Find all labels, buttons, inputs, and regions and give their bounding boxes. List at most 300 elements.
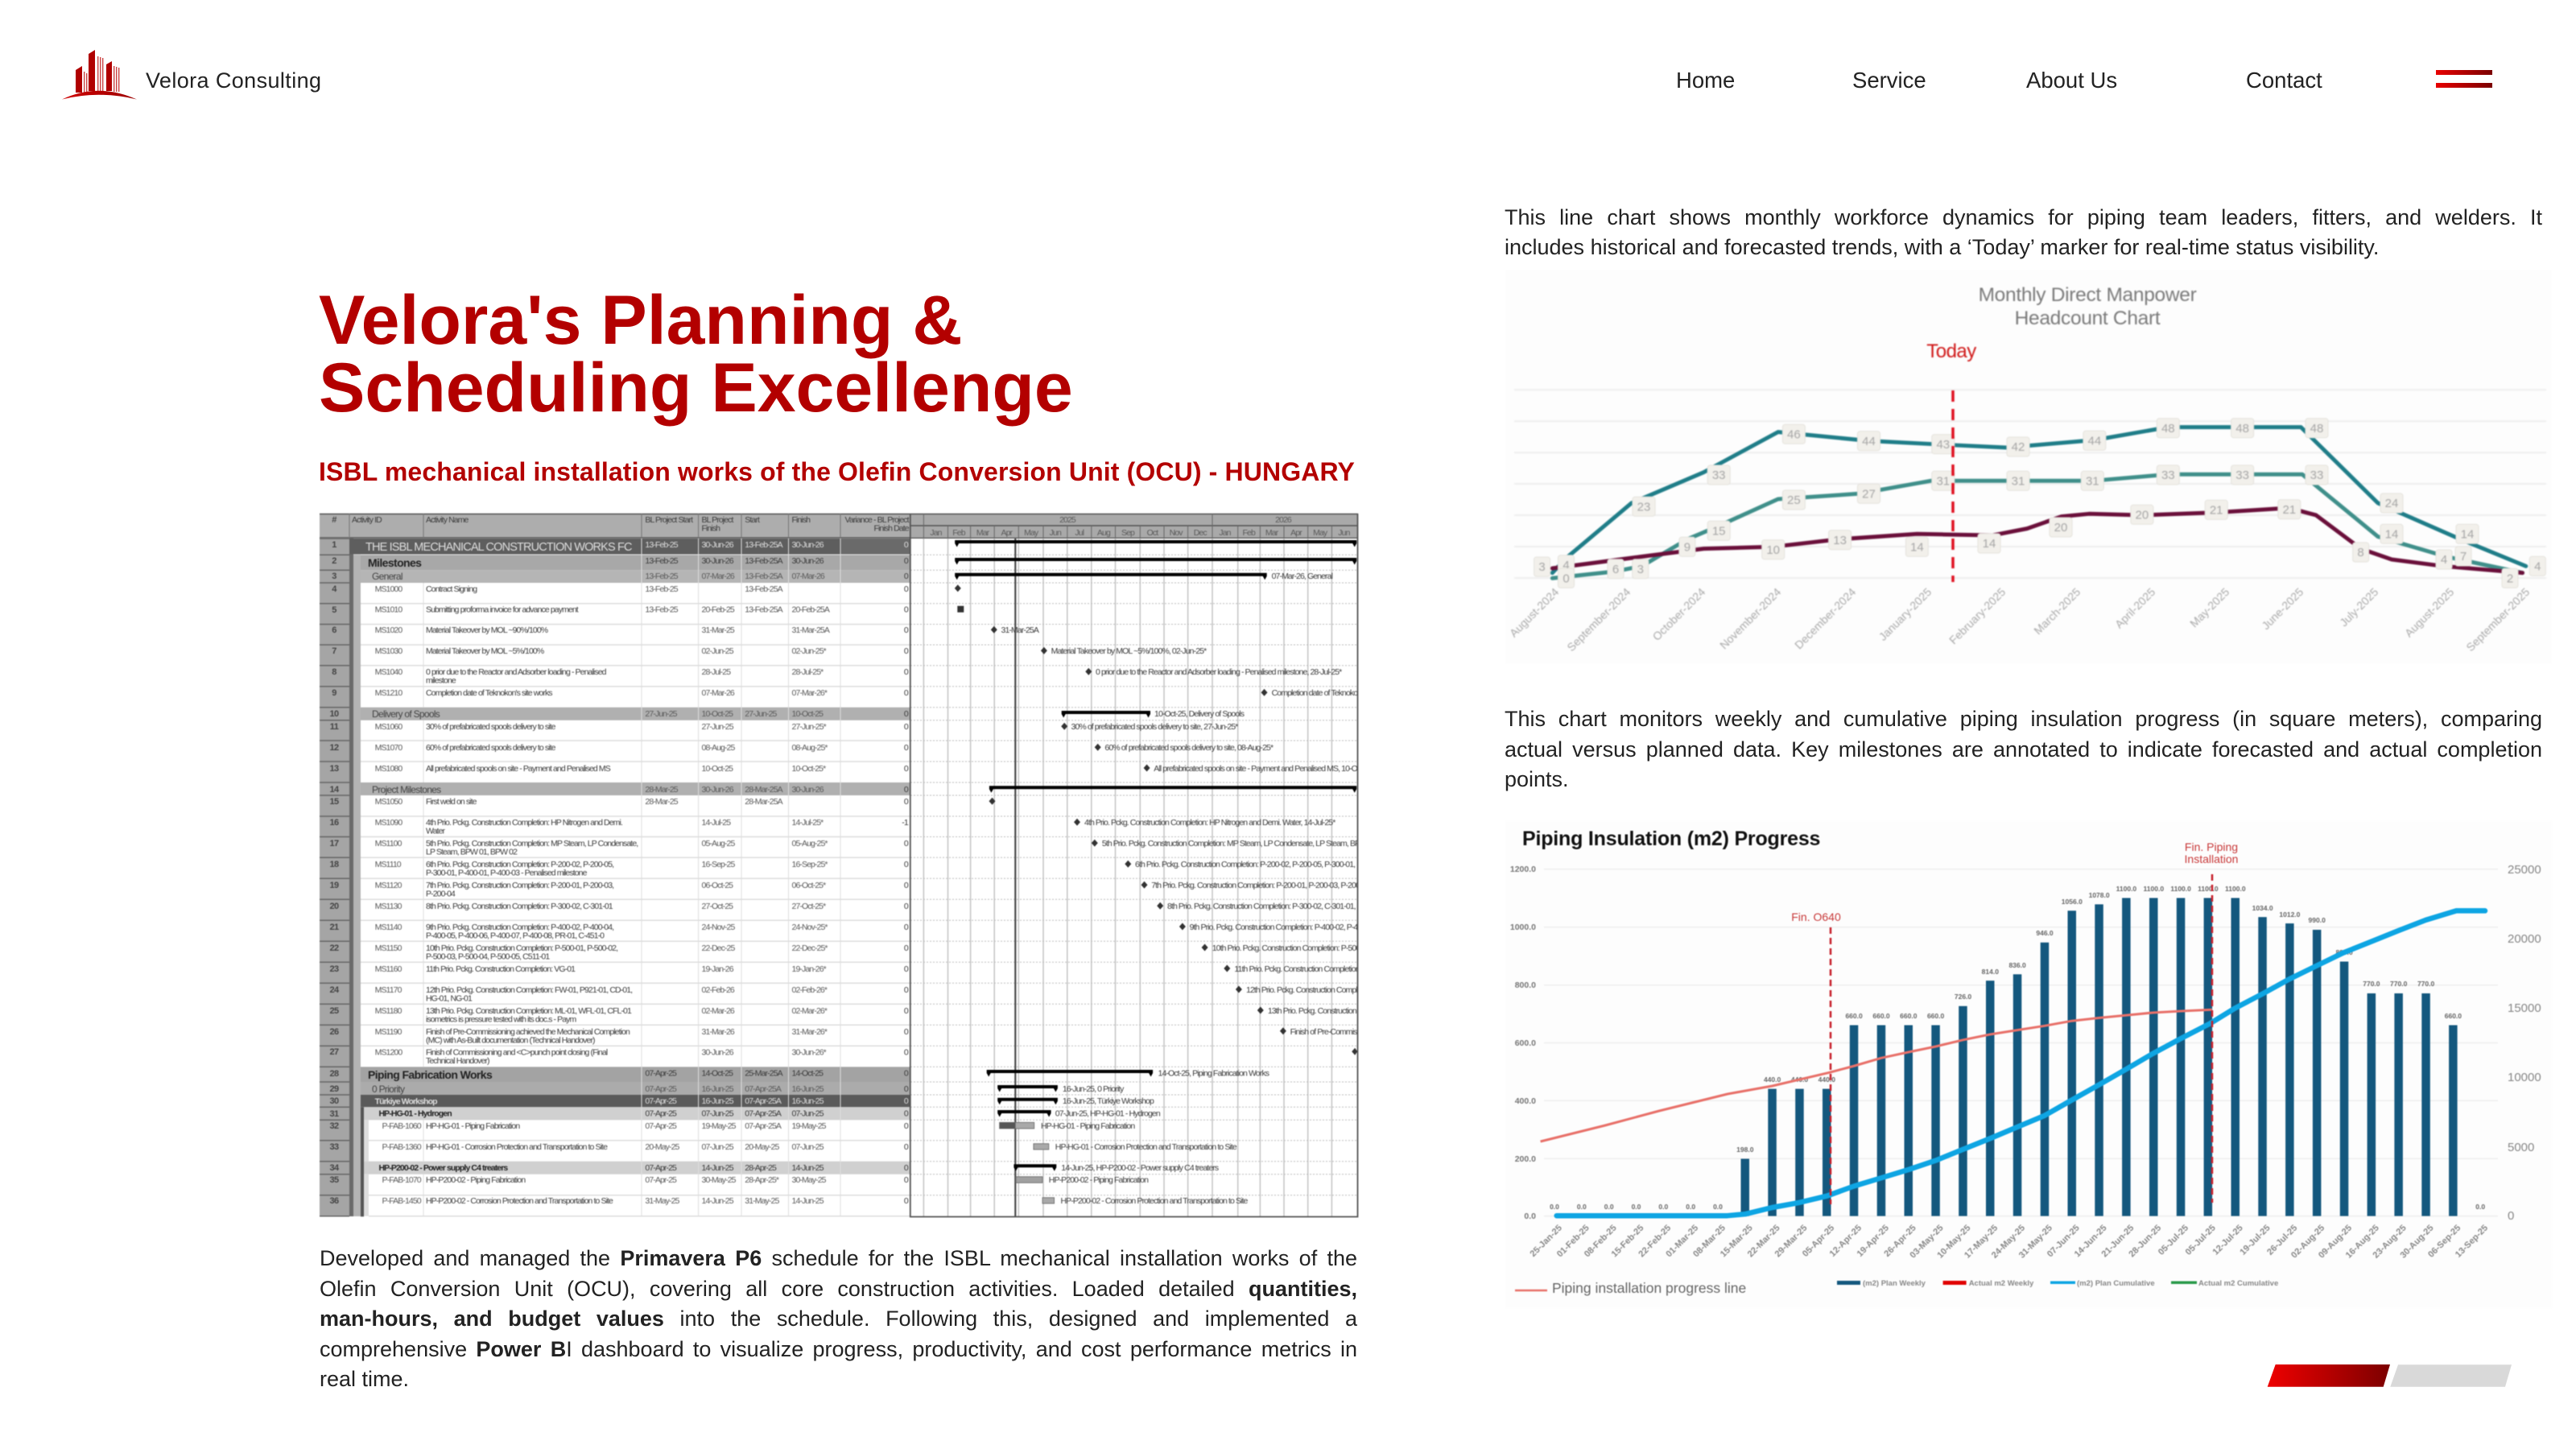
data labels: 33 (1712, 469, 1726, 482)
text block: insulation chart description: points. (1505, 767, 1569, 791)
gantt delivery of spools rows: 10-Oct-25* (792, 764, 826, 774)
data labels: 14 (1910, 541, 1924, 554)
text block: insulation chart description: This chart monitors weekly and cumulative piping insulation progress (in square meters), comparing (1505, 707, 2542, 731)
x axis date labels: 05-Jul-25 (2184, 1223, 2218, 1257)
gantt row numbers: 10 (329, 709, 339, 719)
gantt timeline header: years and months: Jan (930, 528, 943, 538)
chart title: Headcount Chart (2015, 308, 2161, 329)
x axis month labels: September-2025 (2463, 585, 2533, 654)
gantt milestones rows: 13-Feb-25A (745, 540, 783, 550)
gantt project milestones rows: 0 (904, 902, 909, 911)
gantt piping fabrication rows: 07-Apr-25 (645, 1109, 677, 1119)
gantt piping fabrication rows: 20-May-25 (745, 1142, 779, 1152)
gantt table header: BL Project (702, 515, 734, 525)
gantt project milestones rows: 8th Prio. Pckg. Construction Completion: P-300-02, C-301-01 (426, 902, 613, 911)
data labels: 8 (2357, 546, 2364, 559)
gantt project milestones rows (372, 784, 909, 1066)
x axis month labels: February-2025 (1946, 585, 2008, 646)
gantt delivery of spools rows: 08-Aug-25 (702, 743, 735, 753)
x axis date labels: 07-Jun-25 (2046, 1223, 2082, 1259)
title: Scheduling Excellenge (319, 349, 1073, 427)
x axis date labels: 13-Sep-25 (2454, 1223, 2490, 1260)
data labels: 20 (2054, 521, 2067, 535)
x axis date labels: 14-Jun-25 (2073, 1223, 2109, 1259)
gantt project milestones rows: MS1130 (375, 902, 402, 911)
gantt piping fabrication rows: 0 (904, 1142, 909, 1152)
gantt delivery of spools rows (372, 708, 909, 774)
x axis date labels: 03-May-25 (1908, 1223, 1946, 1261)
line: piping installation progress (1541, 1009, 2212, 1141)
gantt piping fabrication rows: 14-Oct-25 (702, 1069, 733, 1079)
bar value labels: 814.0 (1982, 968, 1999, 976)
gantt milestones rows: 31-Mar-25 (702, 625, 735, 635)
gantt bar labels: 14-Oct-25, Piping Fabrication Works (1158, 1069, 1269, 1079)
bar value labels: 198.0 (1736, 1146, 1754, 1154)
gantt piping fabrication rows: 28-Apr-25 (745, 1163, 777, 1173)
gantt project milestones rows: 28-Mar-25A (745, 785, 783, 795)
gantt timeline header: years and months: Dec (1194, 528, 1207, 538)
gantt project milestones rows: Water (426, 827, 446, 836)
bar value labels: 1100.0 (2225, 885, 2246, 893)
gantt row numbers: 16 (329, 818, 339, 828)
data labels: 21 (2210, 504, 2223, 517)
bar value labels: 1056.0 (2062, 898, 2083, 906)
gantt timeline header: years and months: Jan (1219, 528, 1232, 538)
gantt project milestones rows: P-500-03, P-500-04, P-500-05, C511-01 (426, 952, 550, 962)
text block: schedule description: Olefin Conversion Unit (OCU), covering all core construction activities. Loaded detailed quantities, (320, 1277, 1357, 1301)
legend: progress line: Piping installation progress line (1552, 1280, 1746, 1296)
gantt project milestones rows: 06-Oct-25 (702, 881, 733, 890)
x axis date labels: 25-Jan-25 (1529, 1223, 1564, 1259)
bar value labels: 1100.0 (2116, 885, 2136, 893)
gantt milestones rows: 28-Jul-25* (792, 667, 824, 677)
gantt milestones rows: 31-Mar-25A (792, 625, 830, 635)
legend: series: (m2) Plan Weekly (1863, 1279, 1926, 1288)
x axis date labels: 31-May-25 (2017, 1223, 2054, 1261)
gantt bar labels (1001, 572, 1359, 1206)
data labels: 33 (2310, 469, 2323, 482)
gantt delivery of spools rows: 27-Jun-25 (702, 722, 734, 732)
gantt milestones rows: 13-Feb-25A (745, 605, 783, 615)
gantt row numbers (329, 540, 340, 1206)
gantt bar labels: 60% of prefabricated spools delivery to site, 08-Aug-25* (1104, 743, 1274, 753)
gantt piping fabrication rows: Piping Fabrication Works (368, 1068, 493, 1081)
gantt milestones rows: 13-Feb-25A (745, 572, 783, 581)
gantt project milestones rows: MS1160 (375, 964, 402, 974)
x axis date labels: 10-May-25 (1935, 1223, 1972, 1261)
x axis date labels: 17-May-25 (1963, 1223, 2000, 1261)
gantt piping fabrication rows: 25-Mar-25A (745, 1069, 783, 1079)
gantt milestones rows: 20-Feb-25A (792, 605, 830, 615)
title (319, 282, 1073, 427)
bar value labels: 440.0 (1818, 1075, 1835, 1084)
nav: Contact: Contact (2246, 68, 2322, 93)
gantt row numbers: 25 (329, 1006, 339, 1016)
gantt bar labels: HP-P200-02 - Piping Fabrication (1049, 1175, 1149, 1185)
left axis labels: 400.0 (1515, 1096, 1536, 1106)
bar value labels: 0.0 (1686, 1203, 1695, 1211)
gantt milestones rows (365, 540, 909, 698)
logo wordmark: Velora Consulting (146, 68, 321, 93)
gantt delivery of spools rows: MS1060 (375, 722, 402, 732)
text block: insulation chart description: actual versus planned data. Key milestones are annotated to indicate forecasted and actual completion (1505, 737, 2542, 762)
legend: series: Actual m2 Weekly (1969, 1279, 2034, 1288)
gantt row numbers: 22 (329, 943, 339, 953)
data labels: 3 (1637, 563, 1644, 576)
left axis labels: 600.0 (1515, 1038, 1536, 1048)
gantt project milestones rows: 0 (904, 797, 909, 807)
data labels: 4 (1563, 559, 1570, 572)
data labels: 31 (2012, 475, 2025, 488)
chart: Primavera P6 gantt schedule (319, 513, 1359, 1219)
gantt piping fabrication rows: 07-Apr-25 (645, 1069, 677, 1079)
gantt piping fabrication rows: 16-Jun-25 (702, 1096, 734, 1106)
bar value labels: 946.0 (2036, 929, 2054, 937)
gantt piping fabrication rows: 31-May-25 (645, 1196, 680, 1206)
data labels: 48 (2161, 422, 2175, 436)
gantt milestones rows: Contract Signing (426, 584, 477, 594)
gantt delivery of spools rows: 10-Oct-25 (792, 709, 824, 719)
gantt bar labels: 31-Mar-25A (1001, 625, 1039, 635)
gantt project milestones rows: 0 (904, 923, 909, 932)
gantt piping fabrication rows: 07-Apr-25 (645, 1121, 677, 1131)
gantt project milestones rows: (MC) with As-Built documentation (Technical Handover) (426, 1036, 595, 1046)
gantt piping fabrication rows: 30-May-25 (702, 1175, 737, 1185)
right axis labels: 25000 (2508, 863, 2541, 877)
bar value labels: 0.0 (1550, 1203, 1559, 1211)
gantt delivery of spools rows: Delivery of Spools (372, 708, 440, 720)
gantt timeline header: years and months: Feb (1242, 528, 1256, 538)
gantt piping fabrication rows: 16-Jun-25 (702, 1084, 734, 1094)
gantt piping fabrication rows: P-FAB-1360 (382, 1142, 422, 1152)
gantt project milestones rows: 0 (904, 785, 909, 795)
gantt row numbers: 3 (332, 572, 336, 581)
x axis month labels: May-2025 (2187, 585, 2232, 630)
chart title: Piping Insulation (m2) Progress (1522, 828, 1820, 850)
data labels: 23 (1637, 501, 1650, 514)
x axis date labels: 26-Apr-25 (1882, 1223, 1918, 1259)
gantt piping fabrication rows: 28-Apr-25* (745, 1175, 779, 1185)
text block: manpower chart description (1505, 205, 2542, 259)
gantt project milestones rows: 11th Prio. Pckg. Construction Completion: VG-01 (426, 964, 576, 974)
gantt project milestones rows: 02-Mar-26 (702, 1006, 735, 1016)
gantt project milestones rows: 5th Prio. Pckg. Construction Completion: MP Steam, LP Condensate, (426, 839, 638, 848)
bar value labels: 990.0 (2309, 916, 2326, 924)
data labels: 13 (1833, 534, 1847, 547)
x axis date labels: 02-Aug-25 (2289, 1223, 2326, 1261)
gantt row numbers: 4 (332, 584, 337, 594)
data labels: 31 (2086, 475, 2099, 488)
right axis labels: 10000 (2508, 1071, 2541, 1084)
gantt row numbers: 14 (329, 785, 340, 795)
gantt summary bars (955, 540, 1356, 1171)
gantt row numbers: 8 (332, 667, 336, 677)
gantt project milestones rows: 14-Jul-25* (792, 818, 824, 828)
gantt row numbers: 5 (332, 605, 336, 615)
gantt timeline header: years and months: Sep (1121, 528, 1135, 538)
gantt piping fabrication rows: 30-May-25 (792, 1175, 827, 1185)
gantt milestones rows: Completion date of Teknokon's site works (426, 688, 552, 698)
gantt project milestones rows: 16-Sep-25* (792, 860, 828, 869)
gantt timeline header: years and months: Jul (1075, 528, 1084, 538)
gantt bar labels: 30% of prefabricated spools delivery to site, 27-Jun-25* (1071, 722, 1238, 732)
gantt piping fabrication rows: 07-Apr-25 (645, 1175, 677, 1185)
x axis month labels: April-2025 (2112, 585, 2158, 630)
gantt milestones rows: 02-Jun-25* (792, 646, 827, 656)
gantt row numbers: 1 (332, 540, 336, 550)
text block: insulation chart description (1505, 707, 2542, 791)
chart title: Monthly Direct Manpower (1979, 284, 2197, 306)
gantt milestones rows: Material Takeover by MOL ~90%/100% (426, 625, 548, 635)
data labels: 7 (2460, 550, 2467, 564)
gantt delivery of spools rows: MS1070 (375, 743, 402, 753)
x axis date labels: 30-Aug-25 (2398, 1223, 2436, 1261)
legend: series (1837, 1279, 2278, 1288)
gantt piping fabrication rows: 07-Apr-25 (645, 1084, 677, 1094)
gantt table header: Finish (792, 515, 811, 525)
x axis date labels: 16-Aug-25 (2344, 1223, 2381, 1261)
data labels: 31 (1936, 475, 1950, 488)
bar value labels: 836.0 (2008, 961, 2026, 969)
gantt milestones rows: MS1030 (375, 646, 402, 656)
gantt project milestones rows: 22-Dec-25* (792, 943, 828, 953)
gantt row numbers: 26 (329, 1027, 339, 1037)
gantt bar labels: 16-Jun-25, Türkiye Workshop (1063, 1096, 1154, 1106)
gantt piping fabrication rows: P-FAB-1450 (382, 1196, 422, 1206)
gantt row numbers: 12 (329, 743, 339, 753)
gantt row numbers: 27 (329, 1047, 339, 1057)
gantt delivery of spools rows: 27-Jun-25 (645, 709, 678, 719)
gantt project milestones rows: 05-Aug-25* (792, 839, 828, 848)
gantt milestones rows: 13-Feb-25 (645, 605, 679, 615)
data labels: 2 (2507, 572, 2513, 586)
data labels: 6 (1612, 563, 1619, 576)
gantt project milestones rows: P-200-04 (426, 890, 456, 899)
gantt milestone markers (955, 584, 1357, 1055)
gantt piping fabrication rows: HP-P200-02 - Corrosion Protection and Transportation to Site (426, 1196, 613, 1206)
gantt piping fabrication rows: 07-Jun-25 (792, 1109, 824, 1119)
gantt project milestones rows: 28-Mar-25 (645, 785, 679, 795)
gantt milestones rows: 0 (904, 667, 909, 677)
data labels: 24 (2385, 497, 2398, 510)
chart title (1979, 284, 2197, 329)
gantt bar labels: HP-P200-02 - Corrosion Protection and Transportation to Site (1061, 1196, 1249, 1206)
nav: Service: Service (1852, 68, 1926, 93)
gantt piping fabrication rows: 20-May-25 (645, 1142, 680, 1152)
data labels: 15 (1712, 525, 1726, 538)
gantt row numbers: 29 (329, 1084, 339, 1094)
gantt project milestones rows: 4th Prio. Pckg. Construction Completion: HP Nitrogen and Demi. (426, 818, 622, 828)
gantt project milestones rows: MS1150 (375, 943, 402, 953)
gantt bar labels: Material Takeover by MOL ~5%/100%, 02-Jun-25* (1051, 646, 1207, 656)
gantt project milestones rows: MS1100 (375, 839, 402, 848)
gantt piping fabrication rows: 16-Jun-25 (792, 1096, 824, 1106)
gantt bar labels: 14-Jun-25, HP-P200-02 - Power supply C4 treaters (1061, 1163, 1219, 1173)
gantt milestones rows: 13-Feb-25 (645, 584, 679, 594)
data labels: 21 (2282, 503, 2296, 517)
right axis labels: 15000 (2508, 1001, 2541, 1015)
gantt project milestones rows: 0 (904, 881, 909, 890)
bar value labels: 770.0 (2390, 980, 2408, 988)
gantt row numbers: 20 (329, 902, 339, 911)
gantt milestones rows: MS1010 (375, 605, 402, 615)
gantt timeline header: years and months: May (1313, 528, 1328, 538)
x axis date labels: 01-Feb-25 (1555, 1223, 1591, 1259)
gantt timeline header: years and months: 2025 (1059, 515, 1076, 525)
gantt project milestones rows: 24-Nov-25 (702, 923, 735, 932)
x axis date labels (1529, 1223, 2490, 1261)
gantt delivery of spools rows: 10-Oct-25 (702, 764, 733, 774)
gantt timeline grid (910, 514, 1358, 1217)
text block: schedule description (320, 1246, 1357, 1391)
right axis labels (2508, 863, 2541, 1223)
gantt project milestones rows: 30-Jun-26 (702, 785, 734, 795)
gantt piping fabrication rows: 0 (904, 1109, 909, 1119)
gantt row numbers: 11 (330, 722, 339, 732)
gantt piping fabrication rows: 14-Jun-25 (792, 1196, 824, 1206)
gantt delivery of spools rows: 27-Jun-25 (745, 709, 778, 719)
gantt project milestones rows: 22-Dec-25 (702, 943, 735, 953)
today marker: Today (1926, 341, 1976, 362)
gantt table header: Variance - BL Project (845, 515, 910, 525)
gantt piping fabrication rows: 19-May-25 (702, 1121, 737, 1131)
gantt milestones rows: THE ISBL MECHANICAL CONSTRUCTION WORKS FC (365, 541, 632, 554)
right axis labels: 20000 (2508, 932, 2541, 946)
text block: manpower chart description: includes historical and forecasted trends, with a ‘Today’ marker for real-time status visibility. (1505, 235, 2379, 259)
x axis month labels: September-2024 (1564, 585, 1633, 654)
left axis labels: 1200.0 (1510, 865, 1536, 874)
x axis month labels: October-2024 (1650, 585, 1708, 643)
x axis date labels: 09-Aug-25 (2317, 1223, 2354, 1261)
data labels: 10 (1766, 543, 1780, 557)
gantt piping fabrication rows: HP-HG-01 - Piping Fabrication (426, 1121, 520, 1131)
gantt bar labels: 07-Jun-25, HP-HG-01 - Hydrogen (1055, 1109, 1161, 1119)
x axis date labels: 23-Aug-25 (2372, 1223, 2409, 1261)
bar value labels: 0.0 (1632, 1203, 1641, 1211)
gantt milestones rows: 13-Feb-25 (645, 556, 679, 566)
x axis month labels: March-2025 (2031, 585, 2083, 637)
gantt project milestones rows: 14-Jul-25 (702, 818, 731, 828)
horizontal grid (1514, 390, 2546, 578)
gantt milestones rows: 13-Feb-25A (745, 556, 783, 566)
gantt piping fabrication rows: 07-Apr-25A (745, 1121, 782, 1131)
gantt milestones rows: 30-Jun-26 (792, 556, 824, 566)
x axis month labels (1507, 585, 2533, 654)
gantt project milestones rows: 30-Jun-26 (702, 1048, 734, 1058)
gantt bar labels: 16-Jun-25, 0 Priority (1063, 1084, 1125, 1094)
gantt milestones rows: 20-Feb-25 (702, 605, 735, 615)
gantt project milestones rows: 02-Mar-26* (792, 1006, 828, 1016)
gantt row numbers: 32 (329, 1121, 339, 1131)
legend: series: Actual m2 Cumulative (2198, 1279, 2278, 1288)
gantt bar labels: 0 prior due to the Reactor and Adsorber loading - Penalised milestone, 28-Jul-25* (1096, 667, 1342, 677)
gantt milestones rows: General (372, 571, 402, 582)
gantt row numbers: 13 (329, 764, 339, 774)
right axis labels: 0 (2508, 1209, 2514, 1223)
gantt timeline header: years and months: May (1024, 528, 1039, 538)
data labels: 4 (2534, 560, 2541, 573)
bar value labels: 660.0 (1872, 1012, 1890, 1020)
x axis date labels: 22-Feb-25 (1637, 1223, 1673, 1259)
icon: red skyscrapers on an arc (62, 50, 137, 100)
data labels: 44 (1862, 435, 1876, 448)
data labels: 14 (1983, 537, 1996, 551)
gantt piping fabrication rows: Türkiye Workshop (375, 1096, 437, 1106)
marker: Fin. Piping Installation: Installation (2185, 852, 2238, 865)
gantt project milestones rows: 16-Sep-25 (702, 860, 735, 869)
bar value labels: 660.0 (1927, 1012, 1945, 1020)
marker: Fin. Piping Installation (2185, 840, 2238, 1203)
gantt row numbers: 21 (329, 923, 339, 932)
weekly plan bars (1740, 898, 2458, 1216)
bar value labels: 1034.0 (2252, 904, 2273, 912)
gantt project milestones rows: 27-Oct-25* (792, 902, 826, 911)
gantt row numbers: 7 (332, 646, 336, 656)
nav: About Us: About Us (2026, 68, 2117, 93)
gantt row numbers: 18 (329, 860, 339, 869)
gantt timeline header: years and months (910, 514, 1358, 539)
bar value labels: 660.0 (1900, 1012, 1918, 1020)
gantt row numbers: 9 (332, 688, 336, 698)
data labels: 33 (2161, 469, 2175, 482)
gantt bar labels: 07-Mar-26, General (1272, 572, 1333, 581)
gantt project milestones rows: Project Milestones (372, 784, 441, 795)
gantt milestones rows: 13-Feb-25 (645, 540, 679, 550)
gantt piping fabrication rows: 0 (904, 1196, 909, 1206)
data labels: 46 (1787, 428, 1801, 441)
gantt milestones rows: milestone (426, 676, 456, 686)
x axis date labels: 15-Mar-25 (1719, 1223, 1755, 1259)
bar value labels: 0.0 (1604, 1203, 1614, 1211)
gantt project milestones rows: MS1120 (375, 881, 402, 890)
gantt timeline header: years and months: Aug (1097, 528, 1111, 538)
data labels: 9 (1684, 541, 1690, 554)
data labels: 14 (2385, 528, 2398, 541)
gantt table header: Finish (702, 523, 720, 533)
gantt project milestones rows: -1 (902, 818, 909, 828)
line: team leaders/fitters/welders series (1552, 427, 2526, 578)
data labels: 43 (1936, 438, 1950, 452)
gantt milestones rows: 30-Jun-26 (702, 556, 734, 566)
data labels: 44 (2088, 435, 2101, 448)
gantt piping fabrication rows: 0 (904, 1096, 909, 1106)
gantt project milestones rows: 31-Mar-26* (792, 1027, 828, 1037)
gantt table header (320, 514, 910, 538)
data labels: 48 (2235, 422, 2249, 436)
gantt project milestones rows: P-300-01, P-400-01, P-400-03 - Penalised milestone (426, 869, 588, 878)
gantt milestones rows: 30-Jun-26 (792, 540, 824, 550)
marker: Fin. O640: Fin. O640 (1791, 910, 1841, 923)
x axis date labels: 12-Jul-25 (2211, 1223, 2245, 1257)
bar value labels: 0.0 (1713, 1203, 1723, 1211)
bar value labels: 660.0 (2445, 1012, 2462, 1020)
data labels: 0 (1563, 572, 1570, 586)
gantt piping fabrication rows: 16-Jun-25 (792, 1084, 824, 1094)
gantt piping fabrication rows: HP-HG-01 - Hydrogen (378, 1109, 452, 1119)
gantt milestones rows: MS1000 (375, 584, 402, 594)
gantt row numbers: 19 (329, 881, 339, 890)
gantt project milestones rows: 0 (904, 985, 909, 995)
x axis month labels: December-2024 (1792, 585, 1859, 651)
gantt project milestones rows: HG-01, NG-01 (426, 994, 473, 1004)
gantt milestones rows: 28-Jul-25 (702, 667, 731, 677)
x axis date labels: 15-Feb-25 (1610, 1223, 1645, 1259)
data labels: 42 (2012, 440, 2025, 454)
x axis date labels: 24-May-25 (1990, 1223, 2027, 1261)
gantt project milestones rows: 02-Feb-26* (792, 985, 828, 995)
gantt project milestones rows: MS1140 (375, 923, 402, 932)
legend: series: (m2) Plan Cumulative (2077, 1279, 2155, 1288)
